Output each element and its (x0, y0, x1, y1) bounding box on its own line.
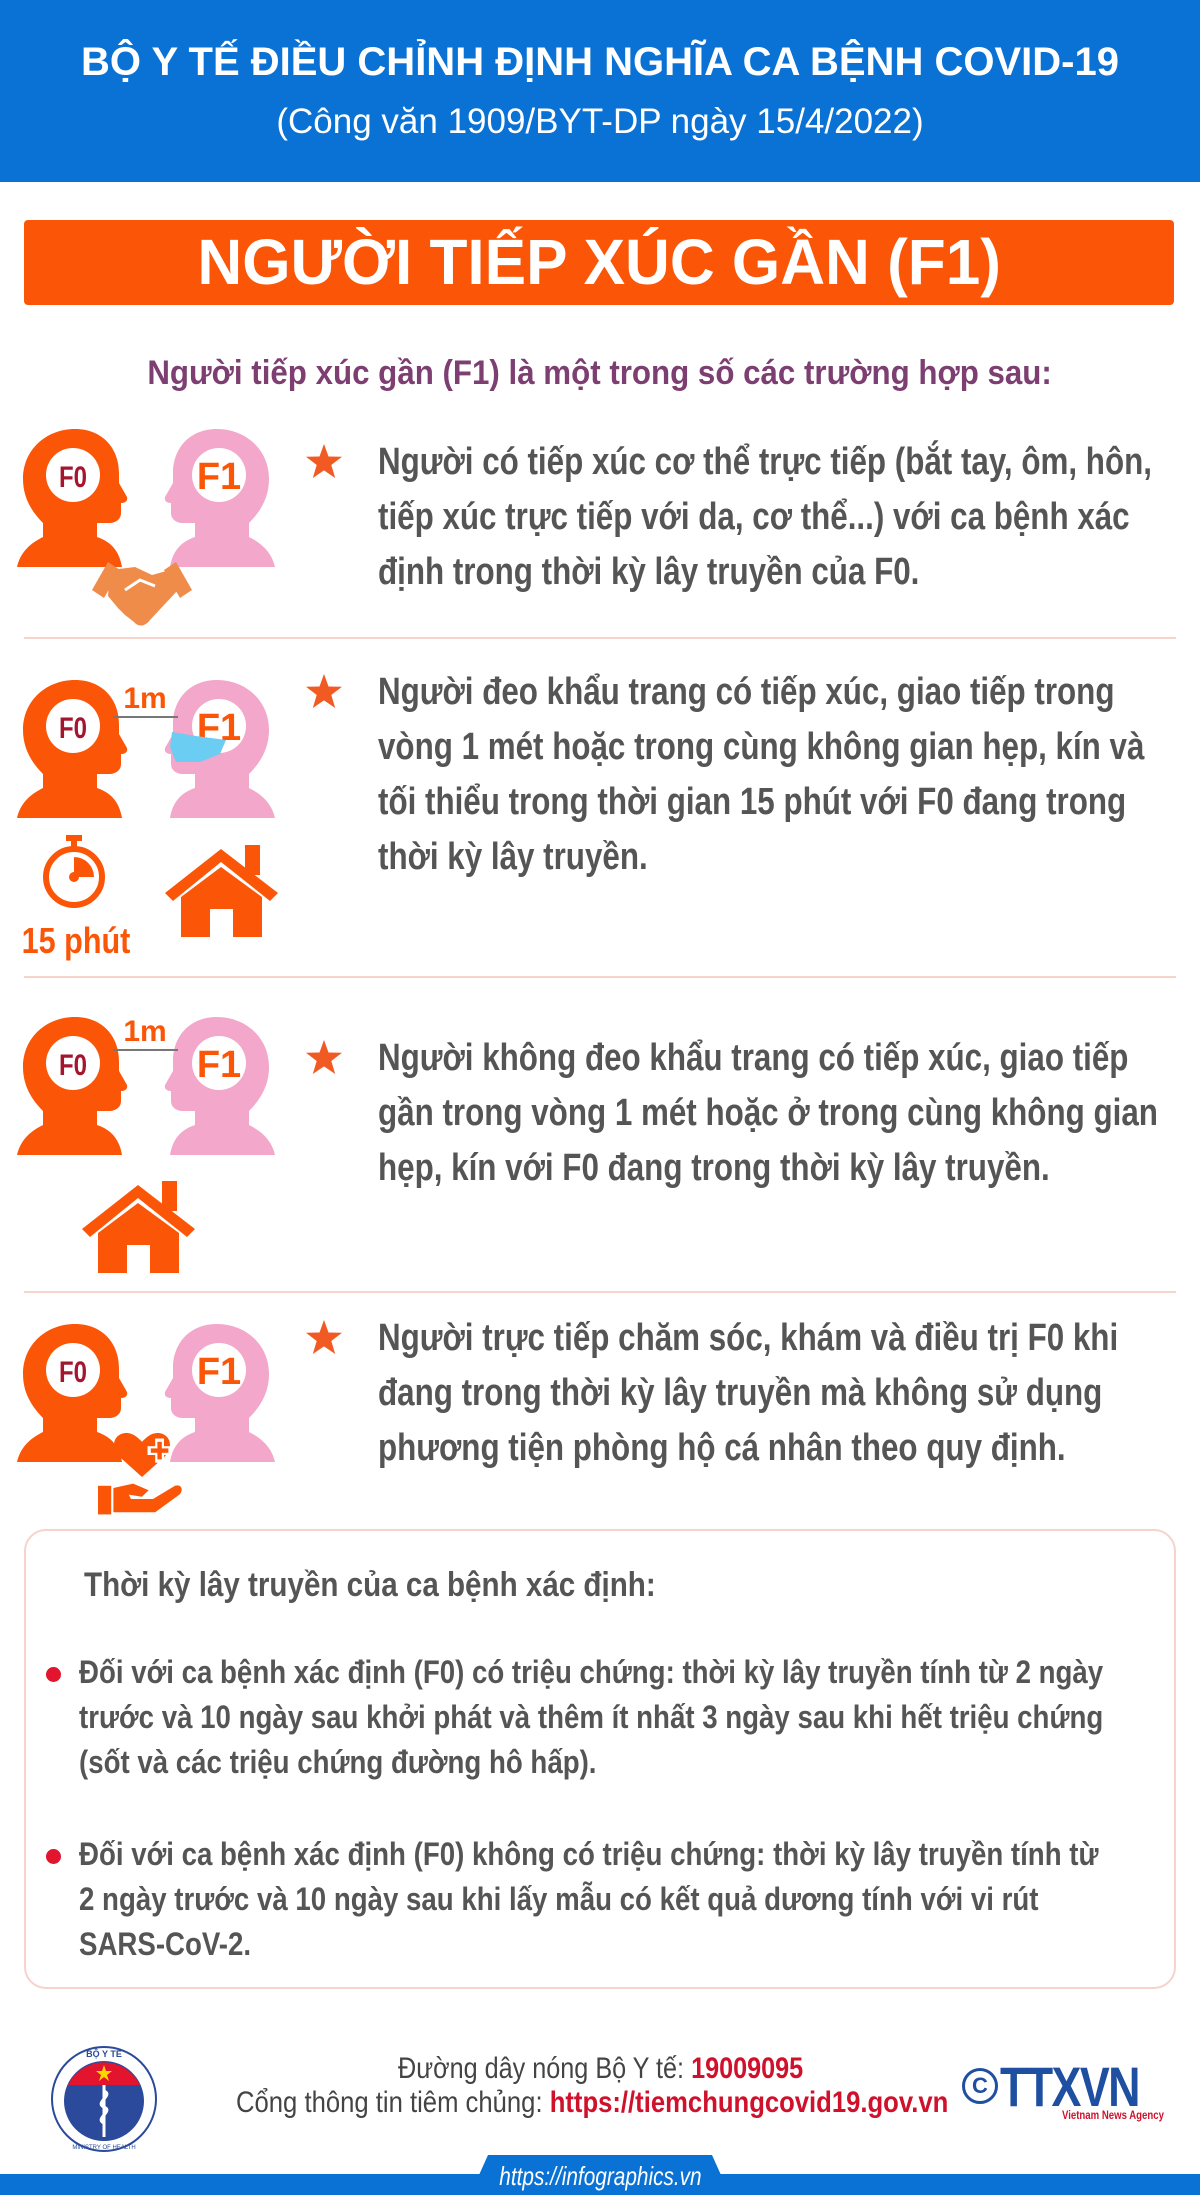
text block 2: tối thiểu trong thời gian 15 phút với F0 đang trong (378, 781, 1126, 823)
text block 4 (378, 1317, 1118, 1469)
icon: stopwatch (46, 835, 102, 905)
icon group: row 4 caregiver: F1 (197, 1351, 241, 1393)
intro text: Người tiếp xúc gần (F1) là một trong số các trường hợp sau: (148, 354, 1052, 392)
star 2 (306, 674, 342, 708)
head F0: F0 (59, 1047, 87, 1082)
bullet 1 (46, 1654, 1103, 1780)
head F0: F0 (59, 1354, 87, 1389)
section banner: F1 (24, 220, 1174, 305)
text block 1: tiếp xúc trực tiếp với da, cơ thể...) với ca bệnh xác (378, 496, 1130, 538)
star 3 (306, 1040, 342, 1074)
icon group: row 1 handshake (17, 429, 275, 626)
icon group: row 4 caregiver (17, 1324, 275, 1514)
text block 4: đang trong thời kỳ lây truyền mà không sử dụng (378, 1372, 1102, 1414)
header banner (0, 0, 1200, 182)
logo: TTXVN: TTXVN (1000, 2055, 1139, 2118)
subtitle: (Công văn 1909/BYT-DP ngày 15/4/2022) (276, 102, 924, 141)
bullet 1: Đối với ca bệnh xác định (F0) có triệu chứng: thời kỳ lây truyền tính từ 2 ngày (79, 1654, 1103, 1690)
head F1 with mask (165, 680, 275, 818)
head F0 (17, 429, 127, 567)
icon group: row 2 masked contact: 1m (123, 682, 167, 715)
icon group: row 2 masked contact: F1 (197, 707, 241, 749)
logo: Ministry of Health: MINISTRY OF HEALTH (72, 2145, 136, 2151)
text block 3: Người không đeo khẩu trang có tiếp xúc, giao tiếp (378, 1037, 1128, 1079)
head F1 (165, 1324, 275, 1462)
logo: TTXVN (962, 2055, 1164, 2122)
bullet 2: SARS-CoV-2. (79, 1926, 251, 1962)
head F0: F0 (59, 710, 87, 745)
bullet 1: (sốt và các triệu chứng đường hô hấp). (79, 1744, 596, 1780)
section banner: F1: NGƯỜI TIẾP XÚC GẦN (F1) (197, 226, 1001, 298)
text block 2: Người đeo khẩu trang có tiếp xúc, giao tiếp trong (378, 671, 1114, 713)
footer bar (0, 2155, 1200, 2195)
icon: heart in hand (98, 1433, 182, 1514)
head F0 (17, 1017, 127, 1155)
footer hotline text (236, 2052, 948, 2119)
star 1 (306, 444, 342, 478)
text block 2: thời kỳ lây truyền. (378, 836, 648, 878)
icon group: row 3 unmasked contact: 1m (123, 1015, 167, 1048)
head F1 (165, 1017, 275, 1155)
icon group: row 2 masked contact: 15 phút (22, 922, 130, 962)
icon: house (82, 1181, 195, 1273)
text block 3: gần trong vòng 1 mét hoặc ở trong cùng không gian (378, 1092, 1158, 1134)
text block 4: phương tiện phòng hộ cá nhân theo quy định. (378, 1427, 1066, 1469)
head F0: F0 (59, 459, 87, 494)
logo: TTXVN: C (972, 2073, 988, 2098)
icon group: row 2 masked contact (17, 680, 278, 962)
bullet 2: 2 ngày trước và 10 ngày sau khi lấy mẫu có kết quả dương tính với vi rút (79, 1881, 1038, 1917)
title: BỘ Y TẾ ĐIỀU CHỈNH ĐỊNH NGHĨA CA BỆNH COVID-19 (81, 40, 1119, 84)
text block 1 (378, 440, 1152, 593)
bullet 2: Đối với ca bệnh xác định (F0) không có triệu chứng: thời kỳ lây truyền tính từ (79, 1836, 1098, 1872)
icon group: row 3 unmasked contact (17, 1015, 275, 1273)
logo: Ministry of Health (51, 2046, 157, 2152)
logo: TTXVN: Vietnam News Agency (1062, 2108, 1164, 2122)
text block 1: Người có tiếp xúc cơ thể trực tiếp (bắt tay, ôm, hôn, (378, 441, 1152, 483)
panel heading: Thời kỳ lây truyền của ca bệnh xác định: (84, 1566, 656, 1604)
icon: house (165, 845, 278, 937)
text block 4: Người trực tiếp chăm sóc, khám và điều trị F0 khi (378, 1317, 1118, 1359)
bullet 2 (46, 1836, 1098, 1962)
icon: handshake (92, 562, 192, 626)
text block 2: vòng 1 mét hoặc trong cùng không gian hẹp, kín và (378, 726, 1144, 768)
star 4 (306, 1320, 342, 1354)
footer bar: https://infographics.vn (499, 2161, 701, 2191)
footer hotline text: Cổng thông tin tiêm chủng: https://tiemchungcovid19.gov.vn (236, 2086, 948, 2119)
footer hotline text: Đường dây nóng Bộ Y tế: 19009095 (398, 2052, 803, 2085)
bullet 1: trước và 10 ngày sau khởi phát và thêm ít nhất 3 ngày sau khi hết triệu chứng (79, 1699, 1103, 1735)
text block 1: định trong thời kỳ lây truyền của F0. (378, 551, 919, 593)
head F1 (165, 429, 275, 567)
icon group: row 1 handshake: F1 (197, 456, 241, 498)
head F0 (17, 680, 127, 818)
text block 3 (378, 1037, 1158, 1189)
logo: Ministry of Health: BỘ Y TẾ (86, 2048, 122, 2059)
head F0 (17, 1324, 127, 1462)
icon group: row 3 unmasked contact: F1 (197, 1044, 241, 1086)
text block 2 (378, 671, 1144, 878)
text block 3: hẹp, kín với F0 đang trong thời kỳ lây truyền. (378, 1147, 1050, 1189)
panel: transmission period (24, 1529, 1176, 1989)
